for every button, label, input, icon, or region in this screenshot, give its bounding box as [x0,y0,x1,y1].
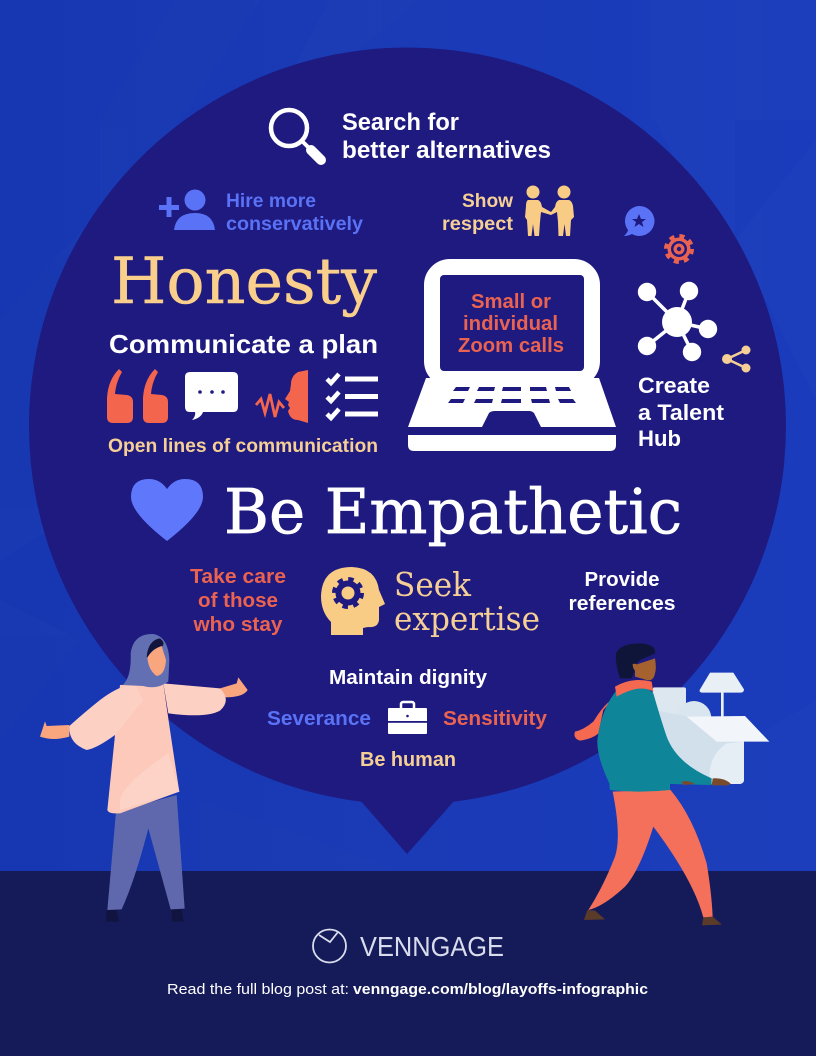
text: show respect: Show [462,190,514,212]
icon: checklist [327,374,378,418]
text: be human: Be human [360,749,456,771]
text: communicate a plan: Communicate a plan [109,329,378,359]
box with belongings and lamp [653,673,769,784]
text: create a talent hub: a Talent [638,400,725,425]
text: take care of those who stay: who stay [192,614,283,636]
icon: heart [131,479,203,541]
text: create a talent hub [638,373,725,451]
icon: speaking voice [256,370,308,423]
speech bubble panel [29,48,786,854]
icon: two people shaking hands [525,186,574,236]
text: search for better alternatives: better alternatives [342,137,551,164]
text: sensitivity: Sensitivity [443,707,548,730]
logo wordmark: VENNGAGE [360,931,504,962]
item: show respect [442,186,574,236]
icon: magnifying glass [271,110,321,160]
text: severance: Severance [267,707,371,730]
laptop keys [448,387,576,403]
text: search for better alternatives [342,109,551,164]
text: small or individual zoom calls [458,290,564,357]
text: hire more conservatively [226,190,363,235]
footer source line: venngage.com/blog/layoffs-infographic [353,982,648,998]
icon: chat bubble [185,372,238,420]
icon: head with gear [321,567,385,635]
text: show respect [442,190,514,235]
logo mark [313,930,346,962]
heading: be empathetic: Be Empathetic [224,475,682,548]
illustration: woman with arms open [40,634,248,922]
text: hire more conservatively: conservatively [226,213,363,235]
text: open lines of communication: Open lines of communication [108,435,378,457]
icon: briefcase [388,702,427,734]
icon: quotation marks [107,369,168,423]
item: hire more conservatively [159,190,363,235]
text: take care of those who stay [190,566,286,636]
text: take care of those who stay: of those [198,590,278,612]
footer band [0,871,816,1056]
footer source line: Read the full blog post at: [167,982,349,998]
text: small or individual zoom calls: Zoom calls [458,334,564,357]
text: create a talent hub: Create [638,373,710,398]
text: show respect: respect [442,213,514,235]
text: provide references: Provide [584,569,660,591]
footer source line [167,982,648,998]
text: seek expertise: Seek [394,565,472,604]
text: provide references [568,569,676,615]
icon: talent hub network [638,282,717,361]
text: take care of those who stay: Take care [190,566,286,588]
illustration: man carrying box [574,643,769,925]
icon: star speech bubble [624,206,654,236]
icon: laptop with small or individual zoom calls [408,267,616,451]
icon: gear [666,236,692,262]
text: seek expertise [394,565,540,638]
text: hire more conservatively: Hire more [226,190,316,212]
icon: share [722,346,750,372]
text: small or individual zoom calls: individual [463,312,558,335]
text: provide references: references [568,593,676,615]
text: maintain dignity: Maintain dignity [329,667,488,689]
heading: honesty: Honesty [111,245,377,319]
text: create a talent hub: Hub [638,426,681,451]
item: search for better alternatives [271,109,551,164]
text: small or individual zoom calls: Small or [471,290,551,313]
icon: add person [159,190,215,230]
logo: venngage [313,930,504,962]
text: search for better alternatives: Search for [342,109,459,136]
text: seek expertise: expertise [394,599,540,638]
